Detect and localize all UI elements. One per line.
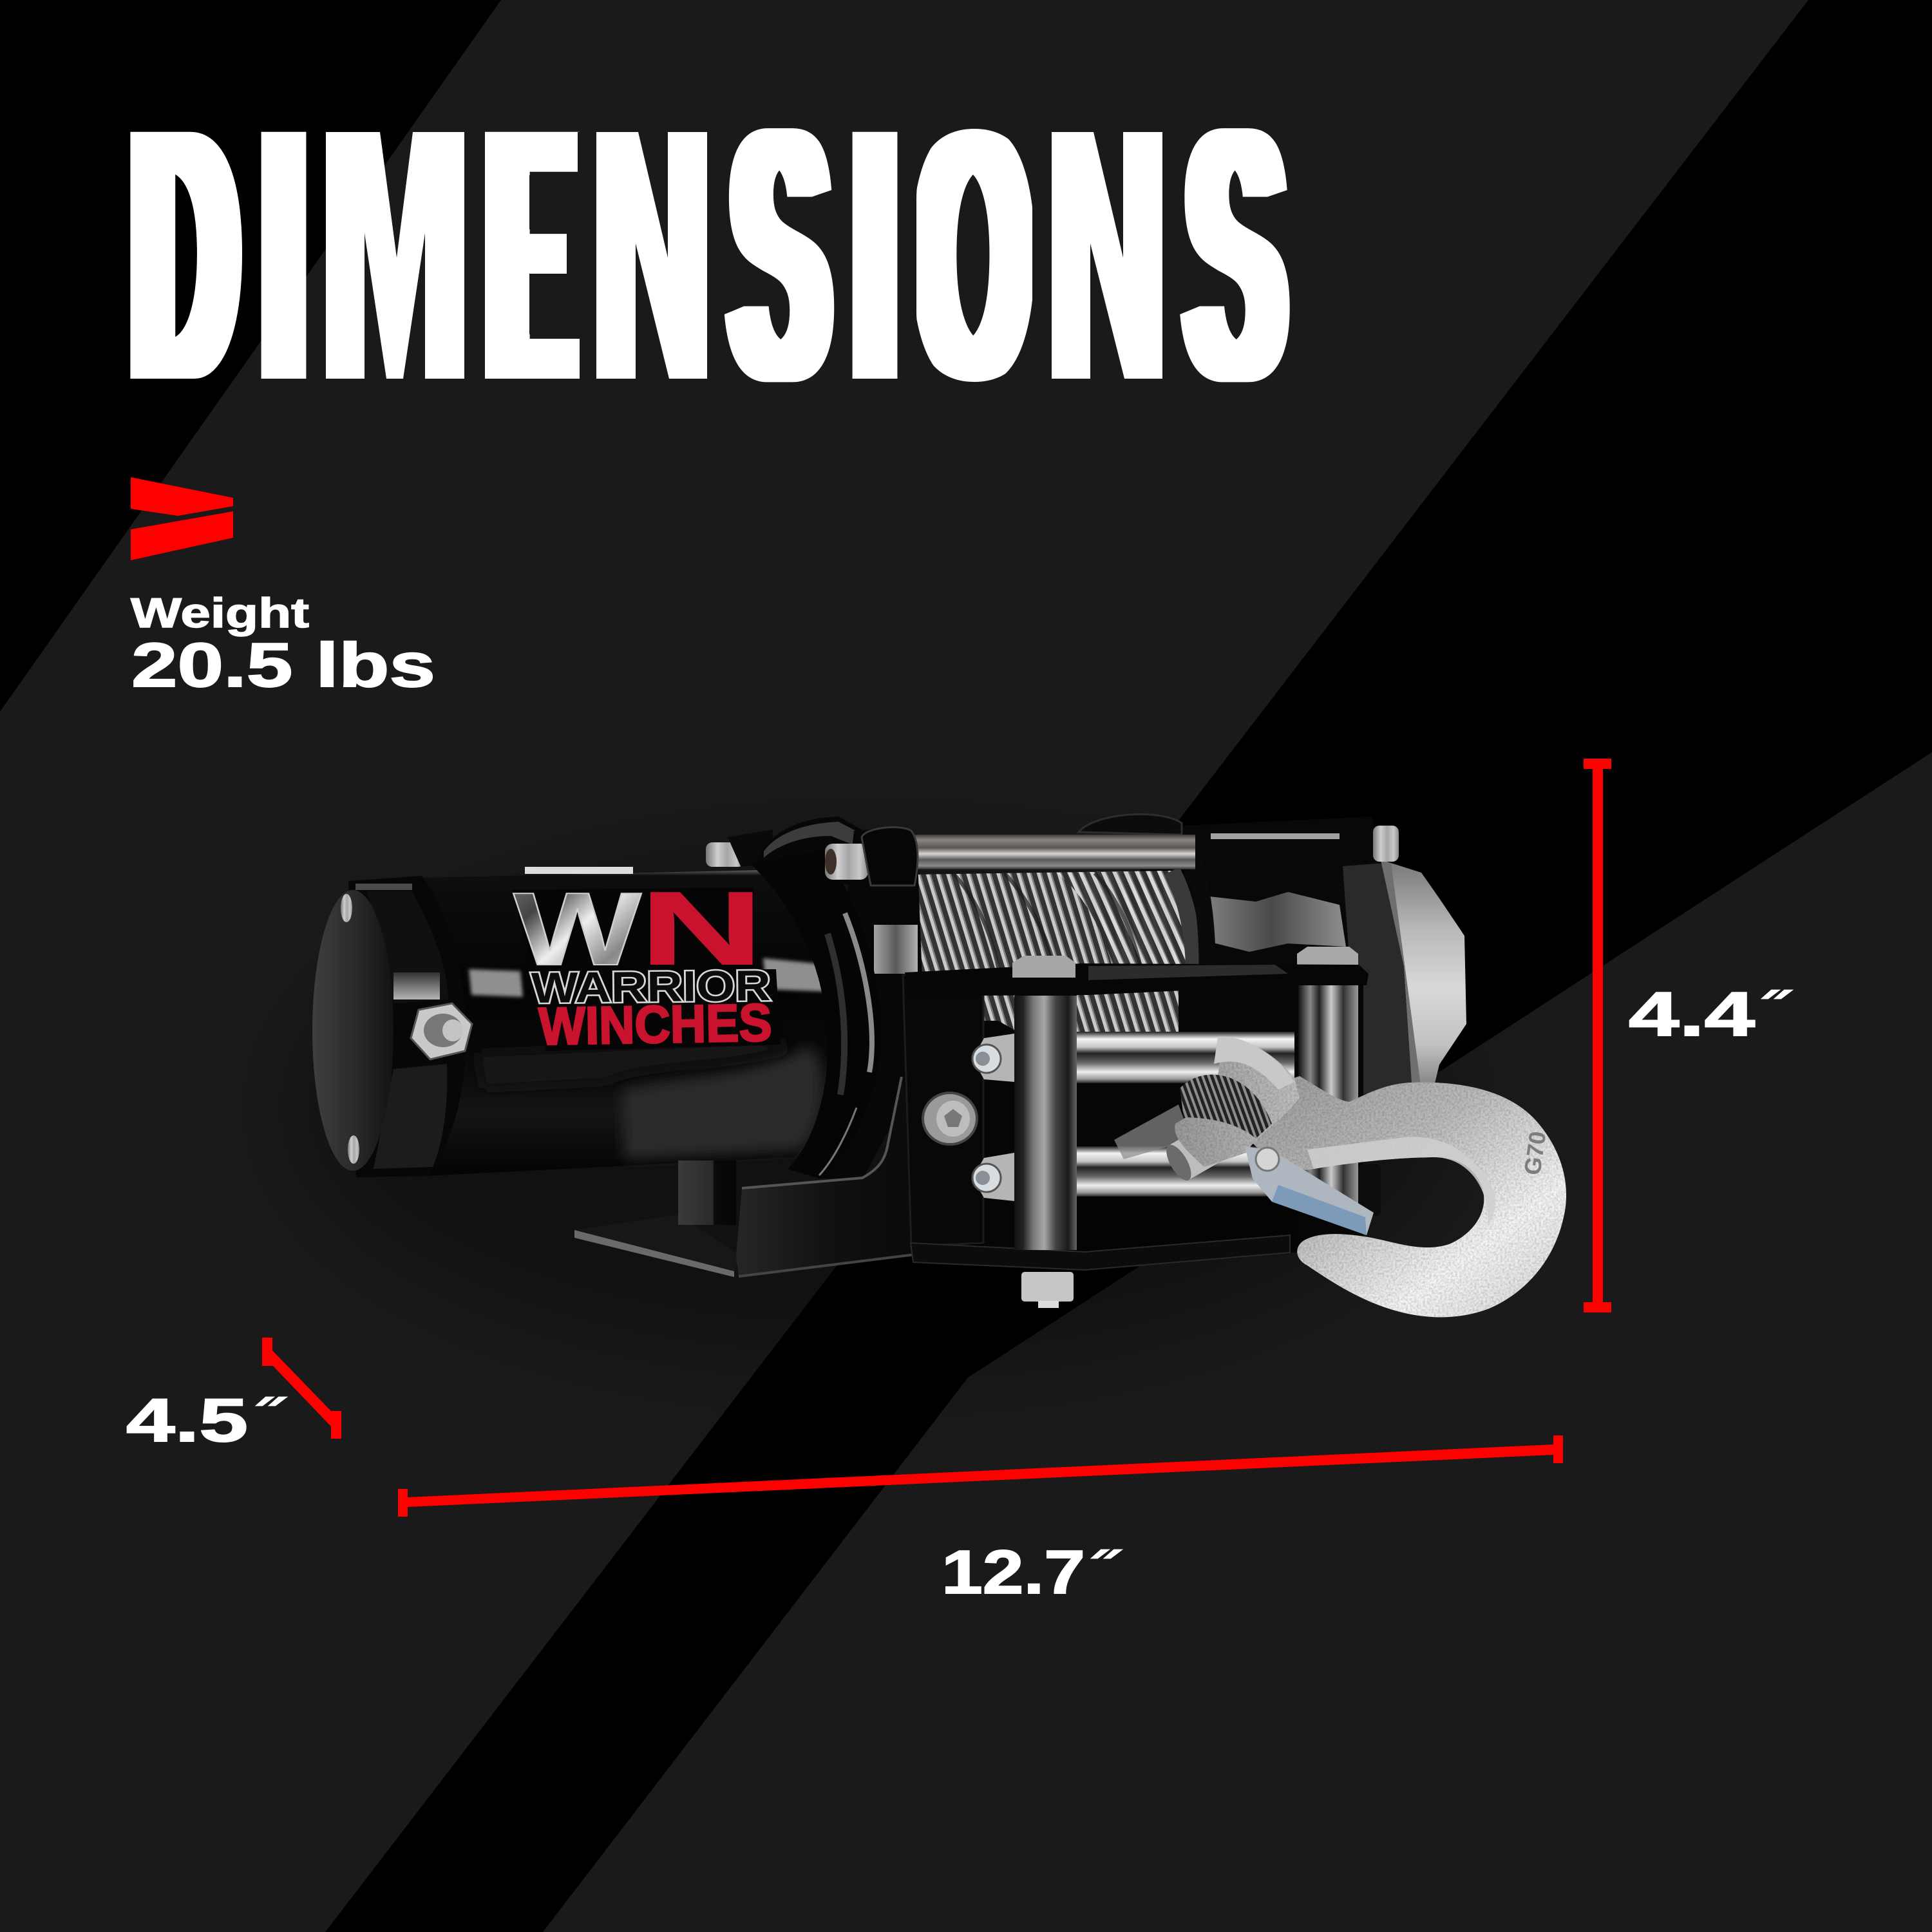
winch photo illustration xyxy=(290,814,1566,1365)
weight label: Weight xyxy=(131,589,309,636)
top plate xyxy=(905,963,1368,996)
gearbox housing xyxy=(1079,814,1466,1103)
lower roller bolt xyxy=(972,1153,1014,1201)
end disc xyxy=(312,890,393,1171)
tie rod xyxy=(914,835,1195,869)
wire drum xyxy=(913,863,1207,1043)
upper roller bolt xyxy=(972,1034,1014,1082)
logo N: N xyxy=(640,871,763,987)
socket crimp xyxy=(1214,1037,1294,1090)
right post bolt xyxy=(1297,947,1358,966)
dimension: length xyxy=(398,1435,1563,1607)
dimension: height xyxy=(1584,759,1806,1312)
gear cover xyxy=(1381,860,1466,1091)
bottom plate xyxy=(911,1235,1290,1270)
side plate xyxy=(903,975,983,1246)
lower roller xyxy=(1075,1146,1269,1197)
length value xyxy=(942,1538,1135,1607)
drop shadow xyxy=(290,850,1449,1365)
flange hump xyxy=(755,817,866,889)
left post xyxy=(1014,996,1077,1250)
length bar xyxy=(398,1435,1563,1517)
rope tail xyxy=(1114,1104,1191,1159)
foot block xyxy=(678,1160,736,1225)
motor xyxy=(312,817,922,1179)
left post bottom nut xyxy=(1021,1272,1074,1308)
length value: " xyxy=(1057,1542,1135,1582)
rear socket screw xyxy=(706,842,744,867)
window background xyxy=(983,985,1363,1253)
socket screw xyxy=(923,1093,977,1144)
cap screws xyxy=(341,894,352,922)
lower reflection xyxy=(621,1046,822,1159)
brand line 2: WINCHES xyxy=(538,994,772,1056)
logo badge xyxy=(512,871,781,1056)
hook body xyxy=(1243,1076,1566,1317)
height bar xyxy=(1584,759,1611,1312)
dimension: depth xyxy=(126,1338,341,1455)
hook assembly xyxy=(1162,1037,1566,1317)
body behind flange xyxy=(818,827,922,1179)
height value xyxy=(1629,979,1806,1049)
rod end screw right xyxy=(1373,826,1399,862)
depth value xyxy=(126,1387,300,1455)
height value: " xyxy=(1728,983,1806,1022)
motor cylinder xyxy=(419,869,828,1176)
left post top bolt xyxy=(1012,956,1075,978)
right post xyxy=(1298,983,1358,1206)
hook stamp: G70 xyxy=(1519,1130,1551,1177)
length value: 12.7 xyxy=(942,1538,1085,1607)
end cap xyxy=(348,876,466,1177)
mounting bracket xyxy=(574,1077,922,1277)
wire thimble coil xyxy=(1180,1075,1272,1139)
hook latch xyxy=(1245,1146,1374,1235)
gloss band right xyxy=(763,958,831,992)
lower black block xyxy=(1075,1197,1298,1251)
rear frame xyxy=(728,829,773,866)
icon: red chevron xyxy=(131,477,233,560)
logo W: W xyxy=(513,871,641,987)
upper roller xyxy=(1075,1032,1294,1083)
L bracket xyxy=(736,1077,922,1276)
hook inner face xyxy=(1307,1137,1495,1227)
depth value: 4.5 xyxy=(126,1387,248,1455)
foot plate xyxy=(574,1215,741,1271)
height value: 4.4 xyxy=(1629,979,1755,1049)
motor flange ring xyxy=(750,850,881,1179)
depth bar xyxy=(262,1338,341,1439)
title: DIMENSIONS xyxy=(133,3,1283,468)
depth value: " xyxy=(222,1390,300,1429)
weight value: 20.5 lbs xyxy=(131,630,435,700)
hook latch pin xyxy=(1162,1124,1225,1184)
top sticker xyxy=(525,867,633,874)
power cable loop xyxy=(1079,814,1182,835)
front rod screw xyxy=(825,844,868,880)
hook socket xyxy=(1175,1038,1300,1167)
terminal nut xyxy=(411,1003,472,1059)
wire behind notch xyxy=(960,989,1015,1030)
weight text block xyxy=(131,589,435,700)
rod bracket xyxy=(862,828,918,886)
brand line 1: WARRIOR xyxy=(531,961,771,1012)
side plate and fairlead xyxy=(903,947,1381,1308)
gloss band left xyxy=(469,969,523,997)
